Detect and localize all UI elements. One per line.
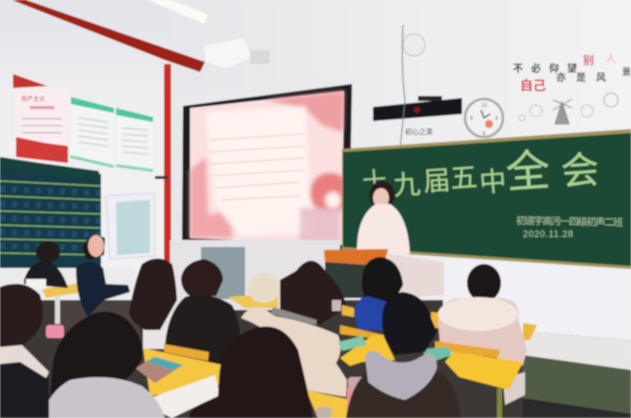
floor	[522, 355, 631, 414]
chalk title: 九	[392, 169, 421, 201]
red vertical pipe	[164, 64, 171, 262]
front left desk	[143, 348, 223, 396]
blackboard	[343, 133, 631, 266]
wall dome fixture	[403, 34, 425, 56]
chalk title: 全	[504, 146, 552, 198]
right front desk	[445, 352, 523, 390]
red ceiling pipe	[12, 0, 205, 72]
green posters	[70, 97, 153, 172]
lower left wall white	[0, 268, 135, 298]
right fur jacket girl	[438, 264, 527, 405]
backpack on desk	[248, 273, 280, 303]
wall bracket	[155, 176, 168, 179]
speaker bar	[373, 96, 462, 121]
red poster	[15, 88, 69, 163]
hooded girl	[280, 261, 346, 325]
open white notebook	[150, 375, 220, 418]
books on desk	[135, 357, 183, 383]
pink cup	[46, 325, 64, 338]
red poster flag	[13, 74, 47, 88]
wall clock	[465, 99, 503, 137]
center desk	[340, 335, 395, 366]
desk mid-back	[228, 293, 278, 308]
chalk title: 届	[422, 165, 451, 197]
wall slogan: 别	[583, 54, 594, 67]
wall clock: 6	[483, 131, 486, 137]
chalk title	[362, 146, 601, 201]
chair right	[435, 341, 500, 358]
long hair girl	[129, 258, 177, 349]
ponytail girl	[42, 312, 165, 418]
white box	[388, 254, 444, 298]
wall slogan: 景	[622, 67, 631, 77]
wall slogan	[513, 53, 631, 93]
chalk title: 中	[478, 166, 507, 198]
left wall	[0, 0, 168, 300]
chalk title: 五	[449, 162, 478, 194]
podium	[324, 249, 388, 298]
grey hood girl	[346, 292, 461, 418]
wall clock: 12	[481, 103, 487, 109]
yellow desk strips	[342, 305, 537, 340]
wall slogan: 人	[606, 53, 616, 65]
chair center back	[340, 325, 384, 340]
textbook on center desk	[338, 336, 367, 351]
bottle cap	[316, 407, 332, 418]
back wall	[165, 0, 631, 300]
notebook on right desk	[420, 347, 452, 362]
wall clock: 3	[495, 116, 498, 122]
projector	[204, 38, 270, 68]
wall slogan: 亦是风	[556, 71, 606, 84]
projection screen	[182, 84, 352, 251]
chalk title: 十	[362, 167, 387, 196]
ceiling light	[148, 0, 208, 24]
seated woman left	[24, 241, 68, 289]
windmill doodle	[519, 93, 618, 124]
calendar board	[0, 157, 101, 268]
front center dark hair girl	[189, 326, 313, 418]
wall cable	[398, 25, 405, 170]
white lower board wall	[443, 258, 631, 340]
red poster: 共产主义	[21, 94, 45, 103]
wall window	[106, 193, 155, 259]
wall clock: 9	[470, 116, 473, 122]
presenter at podium	[357, 181, 410, 254]
wall slogan: 不必仰望	[513, 62, 577, 75]
screen roller housing	[175, 74, 362, 108]
front left student	[0, 284, 49, 418]
dark jacket girl	[165, 259, 241, 366]
blackboard frame	[342, 129, 631, 269]
wall slogan: 自己	[520, 78, 546, 93]
blue sweater girl	[354, 257, 403, 330]
small wall label: 初心之美	[405, 127, 433, 137]
lower front wall	[170, 240, 340, 310]
desk back left	[42, 283, 83, 298]
chalk note: 初道宇高污一四级初声二班	[516, 214, 623, 229]
chalk title: 会	[560, 149, 601, 194]
lower left floor	[60, 300, 145, 365]
fur jacket girl	[241, 307, 347, 397]
chair behind dark jacket	[164, 344, 209, 361]
chalk note	[516, 214, 623, 239]
front center desk	[306, 390, 433, 418]
smiling woman	[76, 235, 130, 317]
chalk note: 2020.11.28	[523, 229, 573, 239]
chair front center	[366, 393, 439, 417]
pink bottle	[347, 377, 367, 418]
